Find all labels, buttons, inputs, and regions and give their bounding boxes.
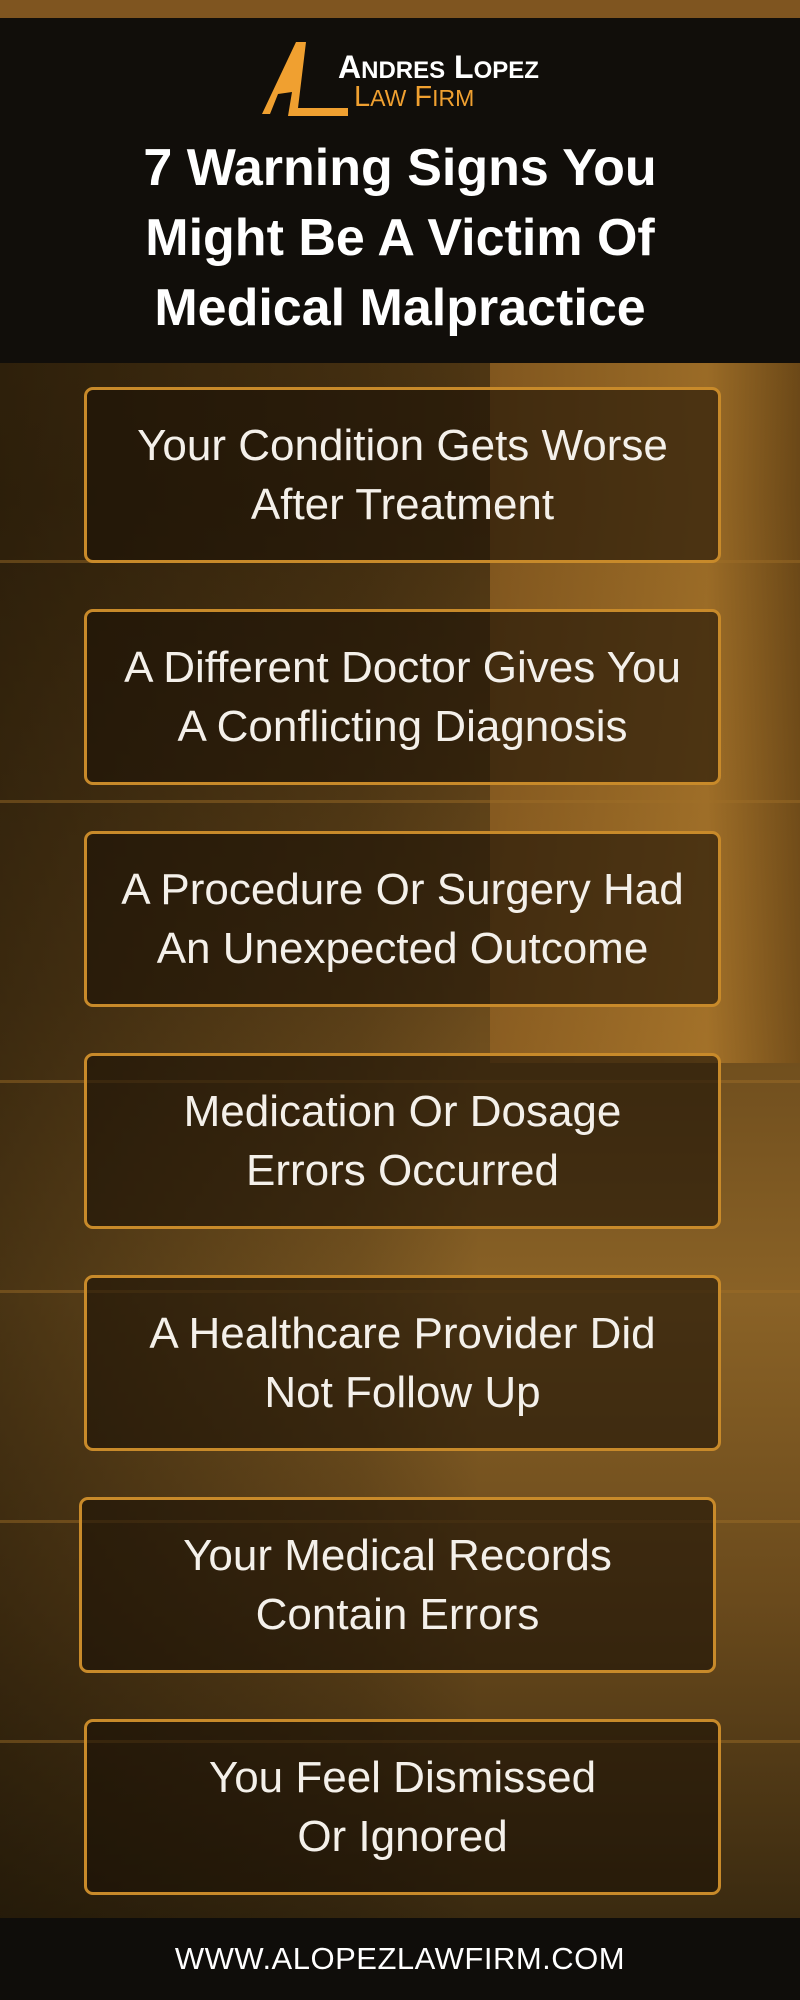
- box 4: Errors Occurred: [246, 1146, 559, 1195]
- box 1: [84, 387, 721, 563]
- box 6: Your Medical Records: [183, 1531, 612, 1580]
- header panel: [0, 18, 800, 363]
- box 2: [84, 609, 721, 785]
- box 6: Contain Errors: [256, 1590, 539, 1639]
- logo: ANDRES LOPEZ: [338, 49, 539, 85]
- footer: WWW.ALOPEZLAWFIRM.COM: [175, 1941, 625, 1976]
- box 5: A Healthcare Provider Did: [149, 1309, 656, 1358]
- box 3: An Unexpected Outcome: [157, 924, 648, 973]
- box 1: Your Condition Gets Worse: [137, 421, 668, 470]
- box 3: A Procedure Or Surgery Had: [121, 865, 684, 914]
- box 7: Or Ignored: [297, 1812, 508, 1861]
- box 4: Medication Or Dosage: [184, 1087, 621, 1136]
- box 2: A Conflicting Diagnosis: [177, 702, 628, 751]
- title: Medical Malpractice: [154, 279, 646, 337]
- box 1: After Treatment: [251, 480, 554, 529]
- box 7: [84, 1719, 721, 1895]
- logo: [262, 42, 539, 116]
- box 5: [84, 1275, 721, 1451]
- box 7: You Feel Dismissed: [209, 1753, 596, 1802]
- box 2: A Different Doctor Gives You: [124, 643, 681, 692]
- box 5: Not Follow Up: [264, 1368, 541, 1417]
- title: Might Be A Victim Of: [145, 209, 655, 267]
- box 3: [84, 831, 721, 1007]
- title: [143, 139, 657, 337]
- logo: LAW FIRM: [354, 81, 474, 113]
- box 4: [84, 1053, 721, 1229]
- title: 7 Warning Signs You: [143, 139, 657, 197]
- footer: [0, 1918, 800, 2000]
- box 6: [79, 1497, 716, 1673]
